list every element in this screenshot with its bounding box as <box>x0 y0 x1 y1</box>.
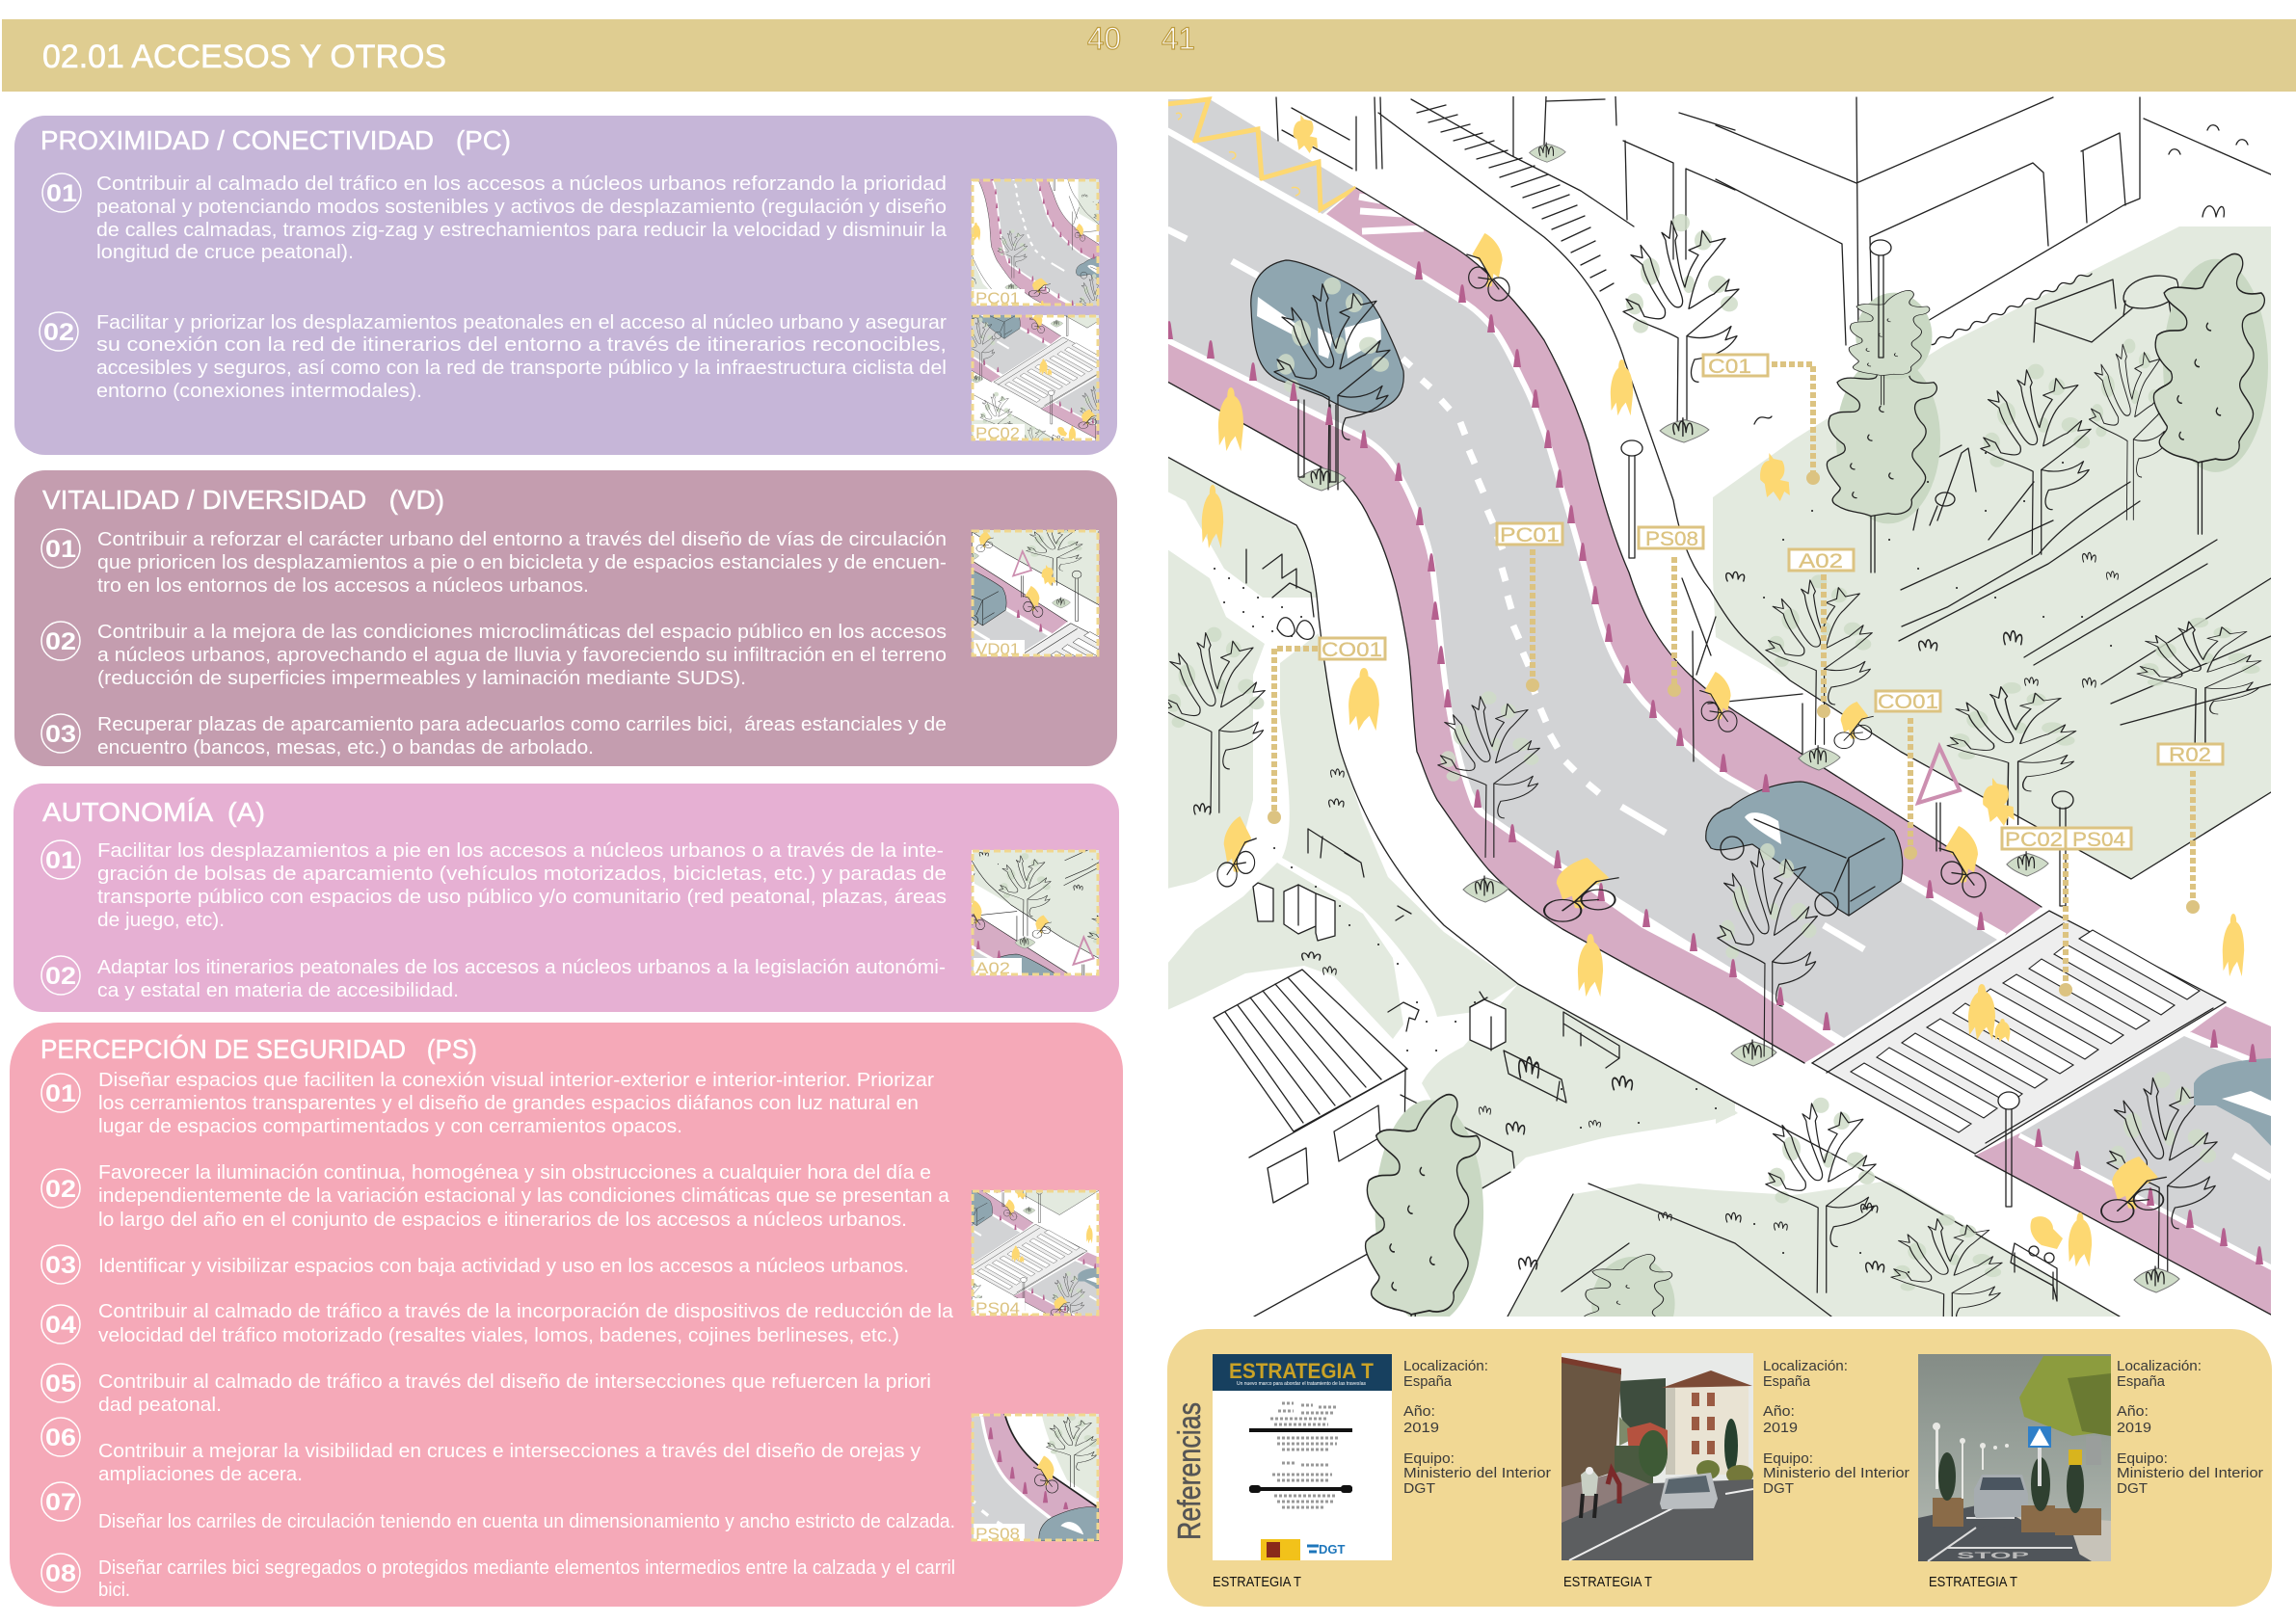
item PS 02: Favorecer la iluminación continua, homogénea y sin obstrucciones a cualquier hora del día e <box>98 1161 931 1184</box>
item VD 01: Contribuir a reforzar el carácter urbano del entorno a través del diseño de vías de circulación <box>97 528 947 550</box>
item PS 02: lo largo del año en el conjunto de espacios e itinerarios de los accesos a núcleos urbanos. <box>98 1209 907 1231</box>
stroller <box>2029 1216 2063 1263</box>
label A02: A02 <box>1799 550 1843 572</box>
item A 02 <box>41 956 946 1001</box>
thumbnail VD01: VD01 <box>975 640 1020 658</box>
thumbnail PS08 <box>972 1414 1099 1543</box>
item VD 03: encuentro (bancos, mesas, etc.) o bandas de arbolado. <box>97 736 594 758</box>
item PS 07: 07 <box>45 1489 76 1516</box>
caption 2: ESTRATEGIA T <box>1563 1575 1652 1590</box>
item PS 03: 03 <box>45 1252 76 1279</box>
heading PS: PERCEPCIÓN DE SEGURIDAD (PS) <box>40 1034 477 1064</box>
item PS 01: lugar de espacios compartimentados y con cerramientos opacos. <box>98 1115 682 1137</box>
car top <box>1251 260 1403 490</box>
item PS 07 <box>41 1482 955 1532</box>
pedestrians <box>1202 359 2244 1266</box>
item PC 01: longitud de cruce peatonal). <box>96 241 354 263</box>
photo 3: foggy traffic calming <box>1918 1354 2111 1561</box>
triangular sign <box>1918 747 1960 851</box>
road surface <box>1167 134 1997 1038</box>
reference text 2: 2019 <box>1763 1421 1798 1436</box>
label PC01: PC01 <box>1500 524 1560 546</box>
label C01: C01 <box>1708 356 1751 378</box>
item A 01: gración de bolsas de aparcamiento (vehículos motorizados, bicicletas, etc.) y paradas de <box>97 863 947 885</box>
seated figures <box>1294 115 2015 826</box>
thumbnail PC01: PC01 <box>975 289 1020 307</box>
pedestrian crossing <box>1812 911 2226 1154</box>
item VD 02: a núcleos urbanos, aprovechando el agua de lluvia y favoreciendo su infiltración en el terreno <box>97 644 947 666</box>
item VD 01: 01 <box>45 536 76 563</box>
item PS 05: 05 <box>45 1370 76 1397</box>
lamp posts <box>1298 240 2073 1207</box>
item VD 01 <box>41 528 947 597</box>
label A02 <box>1789 549 1854 718</box>
item PC 01: Contribuir al calmado del tráfico en los accesos a núcleos urbanos reforzando la prioridad <box>96 173 947 195</box>
item VD 02 <box>41 621 947 689</box>
heading A: AUTONOMÍA (A) <box>42 797 265 827</box>
label PC02 PS04 <box>2002 828 2131 997</box>
item VD 03: 03 <box>45 721 76 748</box>
item PS 04: velocidad del tráfico motorizado (resaltes viales, lomos, badenes, cojines berlineses, etc.) <box>98 1324 899 1346</box>
page number 40: 40 <box>1087 21 1121 56</box>
item PC 02: su conexión con la red de itinerarios del entorno a través de itinerarios reconocibles, <box>96 333 947 356</box>
label PC02 PS04: PC02 <box>2005 829 2063 851</box>
poplar trees <box>1366 253 2268 1390</box>
thumbnail A02: A02 <box>975 959 1010 977</box>
item PS 05 <box>41 1364 931 1416</box>
label PC02 PS04: PS04 <box>2072 829 2125 851</box>
reference text 3: España <box>2117 1374 2166 1390</box>
reference text 1 <box>1403 1359 1551 1497</box>
reference text 1: Equipo: <box>1403 1451 1455 1467</box>
thumbnail VD01 <box>681 265 1168 834</box>
item A 02: 02 <box>45 963 76 990</box>
item PS 02 <box>41 1161 950 1231</box>
panel: referencias <box>1167 1329 2272 1607</box>
item PS 05: dad peatonal. <box>98 1394 222 1416</box>
upper bike lane <box>1326 188 2042 936</box>
reference text 3: Localización: <box>2117 1359 2202 1374</box>
item VD 01: que prioricen los desplazamientos a pie o en bicicleta y de espacios estanciales y de encuen- <box>97 551 947 573</box>
label PC01 <box>1497 523 1562 692</box>
grass tufts <box>1194 552 2118 1272</box>
thumbnail A02 <box>705 620 1245 1251</box>
item A 01 <box>41 839 947 931</box>
referencias vertical heading: Referencias <box>1171 1402 1207 1540</box>
item A 01: Facilitar los desplazamientos a pie en los accesos a núcleos urbanos o a través de la inte- <box>97 839 944 862</box>
lower bike lane <box>1167 340 1838 1063</box>
caption 1: ESTRATEGIA T <box>1213 1575 1301 1590</box>
label R02 <box>2158 744 2223 914</box>
item VD 03: Recuperar plazas de aparcamiento para adecuarlos como carriles bici, áreas estanciales y de <box>97 713 947 735</box>
green areas <box>1167 226 2271 1317</box>
thumbnail PS04: PS04 <box>975 1299 1020 1317</box>
car lower right <box>2194 1058 2271 1146</box>
item PC 01: peatonal y potenciando modos sostenibles y activos de desplazamiento (regulación y diseño <box>96 196 947 218</box>
header band <box>2 19 2296 92</box>
item VD 02: Contribuir a la mejora de las condiciones microclimáticas del espacio público en los accesos <box>97 621 947 643</box>
label CO01 left <box>1268 638 1385 824</box>
photo 2: street with cyclists <box>1562 1353 1753 1560</box>
dotted paths <box>1215 453 2111 1272</box>
reference text 3: DGT <box>2117 1481 2148 1497</box>
reference text 1: España <box>1403 1374 1453 1390</box>
item PS 04: 04 <box>45 1312 76 1339</box>
item A 01: de juego, etc). <box>97 909 225 931</box>
caption 3: ESTRATEGIA T <box>1929 1575 2017 1590</box>
cover image: Estrategia T <box>1213 1354 1392 1560</box>
item VD 02: 02 <box>45 628 76 655</box>
car middle <box>1706 782 1903 1056</box>
item PC 02: Facilitar y priorizar los desplazamientos peatonales en el acceso al núcleo urbano y asegurar <box>96 311 947 333</box>
reference text 1: 2019 <box>1403 1421 1439 1436</box>
trees <box>1163 214 2261 1356</box>
item PC 02 <box>40 311 947 402</box>
item A 01: 01 <box>45 847 76 874</box>
item VD 01: tro en los entornos de los accesos a núcleos urbanos. <box>97 574 589 597</box>
reference text 1: Localización: <box>1403 1359 1488 1374</box>
item PS 03: Identificar y visibilizar espacios con baja actividad y uso en los accesos a núcleos urbanos. <box>98 1255 909 1277</box>
item PS 05: Contribuir al calmado de tráfico a través del diseño de intersecciones que refuercen la priori <box>98 1370 931 1393</box>
item PS 07: Diseñar los carriles de circulación teniendo en cuenta un dimensionamiento y ancho estricto de calzada. <box>98 1510 955 1532</box>
reference text 2: Equipo: <box>1763 1451 1813 1467</box>
photo 3: foggy traffic calming: STOP <box>1957 1551 2029 1560</box>
reference text 3 <box>2117 1359 2263 1497</box>
item PS 02: independientemente de la variación estacional y las condiciones climáticas que se presentan a <box>98 1184 950 1207</box>
item PS 01: 01 <box>45 1080 76 1107</box>
reference text 2 <box>1763 1359 1909 1497</box>
label R02: R02 <box>2169 744 2211 766</box>
item PS 08: 08 <box>45 1560 76 1587</box>
item A 02: ca y estatal en materia de accesibilidad. <box>97 979 459 1001</box>
item A 02: Adaptar los itinerarios peatonales de los accesos a núcleos urbanos a la legislación autonómi- <box>97 956 946 978</box>
item PC 01 <box>42 173 948 263</box>
label PS08 <box>1639 527 1703 697</box>
item PS 06: Contribuir a mejorar la visibilidad en cruces e intersecciones a través del diseño de orejas y <box>98 1440 921 1462</box>
label PS08: PS08 <box>1645 528 1698 550</box>
reference text 2: DGT <box>1763 1481 1794 1497</box>
thumbnail PS08: PS08 <box>975 1525 1020 1543</box>
crosswalk stripes at lane start <box>1359 197 1424 231</box>
panel: proximidad / conectividad <box>14 55 1241 478</box>
reference text 3: Equipo: <box>2117 1451 2168 1467</box>
item PS 06: 06 <box>45 1424 76 1451</box>
reference text 1: Año: <box>1403 1404 1435 1420</box>
item PC 02: 02 <box>43 319 74 346</box>
item PC 01: de calles calmadas, tramos zig-zag y estrechamientos para reducir la velocidad y disminuir la <box>96 219 948 241</box>
item VD 03 <box>41 713 947 758</box>
label CO01 left: CO01 <box>1322 639 1382 661</box>
reference text 2: Localización: <box>1763 1359 1848 1374</box>
label CO01 right <box>1876 691 1940 860</box>
planters <box>1298 143 2179 1292</box>
cover image: Estrategia T: ESTRATEGIA T <box>1229 1359 1375 1383</box>
item PC 02: accesibles y seguros, así como con la red de transporte público y la infraestructura ciclista del <box>96 357 947 379</box>
reference text 3: Ministerio del Interior <box>2117 1466 2263 1481</box>
cyclists <box>1217 233 2166 1222</box>
panel: vitalidad / diversidad <box>14 265 1168 834</box>
isometric street illustration <box>1163 96 2271 1390</box>
white lane lines <box>1167 131 2005 1043</box>
reference text 3: 2019 <box>2117 1421 2151 1436</box>
reference text 1: Ministerio del Interior <box>1403 1466 1551 1481</box>
item PS 06: ampliaciones de acera. <box>98 1463 303 1485</box>
cover image: Estrategia T: DGT <box>1319 1542 1346 1556</box>
road beyond crossing <box>1975 1006 2271 1315</box>
bollards <box>1165 261 2263 1264</box>
thumbnail PC02: PC02 <box>975 424 1020 442</box>
sketch lines: streets and buildings <box>1167 96 2271 1317</box>
centre dashes <box>1167 229 2271 1178</box>
thumbnail PC01 <box>917 55 1241 434</box>
panel: autonomia <box>13 620 1245 1251</box>
thumbnail PS04 <box>776 985 1101 1365</box>
parking strip with zigzag <box>1167 99 1356 214</box>
item PS 04 <box>41 1300 954 1346</box>
item PS 01: Diseñar espacios que faciliten la conexión visual interior-exterior e interior-interior. Priorizar <box>98 1069 934 1091</box>
item PS 08: bici. <box>98 1579 130 1601</box>
panel: percepcion de seguridad <box>10 985 1123 1607</box>
reference text 3: Año: <box>2117 1404 2149 1420</box>
item PS 01 <box>41 1069 934 1137</box>
label CO01 right: CO01 <box>1878 691 1938 713</box>
heading VD: VITALIDAD / DIVERSIDAD (VD) <box>42 485 444 515</box>
cover image: Estrategia T: Un nuevo marco para abordar el tratamiento de las travesías <box>1237 1381 1366 1387</box>
thumbnail PC02 <box>803 98 1129 478</box>
title: 02.01 ACCESOS Y OTROS <box>42 39 446 75</box>
page number 41: 41 <box>1161 21 1195 56</box>
item PS 03 <box>41 1245 909 1284</box>
label C01 <box>1703 355 1820 485</box>
reference text 1: DGT <box>1403 1481 1435 1497</box>
item PS 02: 02 <box>45 1176 76 1203</box>
item PS 08: Diseñar carriles bici segregados o protegidos mediante elementos intermedios entre la calzada y el carril <box>98 1556 955 1579</box>
reference text 2: España <box>1763 1374 1811 1390</box>
item PC 01: 01 <box>46 180 77 207</box>
item A 01: transporte público con espacios de uso público y/o comunitario (red peatonal, plazas, áreas <box>97 886 947 908</box>
reference text 2: Año: <box>1763 1404 1795 1420</box>
item VD 02: (reducción de superficies impermeables y laminación mediante SUDS). <box>97 667 746 689</box>
item PS 08 <box>41 1554 955 1601</box>
map labels and leaders <box>1268 355 2223 997</box>
heading PC: PROXIMIDAD / CONECTIVIDAD (PC) <box>40 125 511 155</box>
item PS 01: los cerramientos transparentes y el diseño de grandes espacios diáfanos con luz natural en <box>98 1092 919 1114</box>
item PS 06 <box>41 1418 921 1485</box>
item PC 02: entorno (conexiones intermodales). <box>96 380 422 402</box>
item PS 04: Contribuir al calmado de tráfico a través de la incorporación de dispositivos de reducción de la <box>98 1300 954 1322</box>
reference text 2: Ministerio del Interior <box>1763 1466 1909 1481</box>
